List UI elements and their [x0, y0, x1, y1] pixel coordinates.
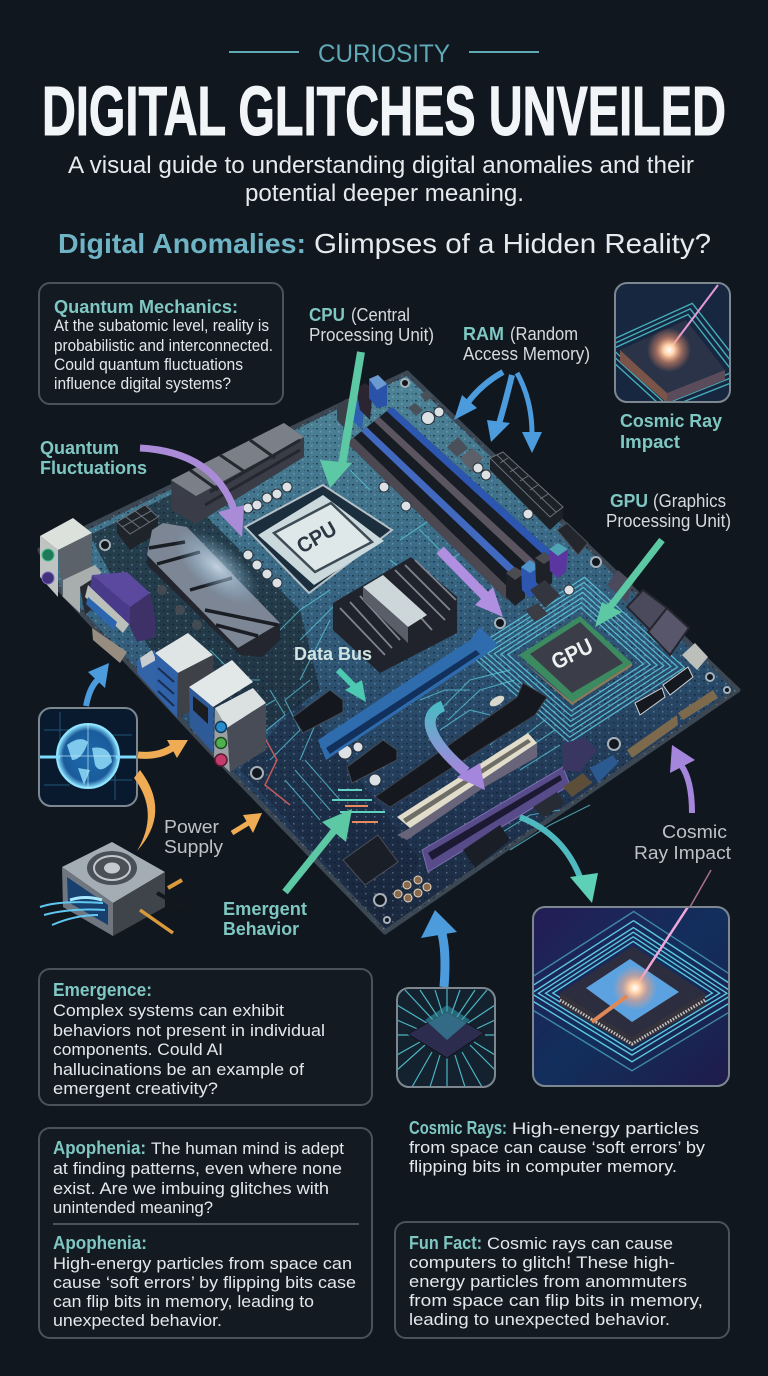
arrow: power: [232, 813, 262, 833]
panel: apophenia: unintended meaning?: [53, 1198, 213, 1217]
subtitle: A visual guide to understanding digital anomalies and their: [68, 152, 694, 179]
label: CPU: CPU: [309, 305, 345, 325]
glitch streaks: [332, 790, 385, 822]
panel: fun fact: Cosmic rays can cause: [487, 1234, 673, 1253]
label: RAM: (Random: [510, 324, 578, 344]
label: RAM: RAM: [463, 324, 504, 344]
GPU trace fans: [467, 577, 684, 742]
thumbnail: data chip: [397, 988, 495, 1087]
dark lower area: [240, 700, 420, 925]
panel: emergence: Complex systems can exhibit: [53, 1001, 284, 1020]
glitch sparkle: [162, 515, 272, 619]
arrow: to GPU region: [440, 550, 503, 617]
RAM bottom clips: [506, 543, 568, 606]
black slots: [293, 683, 547, 807]
arrow: data bus: [338, 670, 366, 702]
icon: power supply unit: [40, 842, 187, 936]
RAM top clips: [337, 375, 387, 430]
panel: apophenia: at finding patterns, even where none: [53, 1159, 342, 1178]
SATA connectors: [635, 667, 693, 715]
label: GPU: (Graphics: [653, 491, 726, 511]
rear ports: PS/2: [40, 518, 92, 597]
panel: quantum mechanics: influence digital systems?: [54, 374, 231, 393]
arrow: GPU: [595, 540, 662, 627]
board: [40, 373, 738, 932]
CPU: CPU: [293, 517, 341, 558]
capacitors: [243, 407, 574, 786]
arrow: globe right: [138, 740, 188, 758]
label: power supply: [164, 817, 223, 857]
white PCI slot: [397, 733, 537, 840]
panel: apophenia: [39, 1128, 372, 1338]
panel: fun fact: Fun Fact:: [409, 1233, 482, 1253]
8-pin connector: [117, 505, 158, 550]
subtitle: [68, 152, 694, 207]
PCIe blue slot: [318, 627, 498, 760]
label: quantum fluctuations: [40, 438, 147, 478]
label: quantum fluctuations: Quantum: [40, 438, 119, 458]
rear ports: LAN and audio: [189, 660, 266, 772]
red trace: [265, 740, 290, 805]
panel: apophenia: The human mind is adept: [151, 1139, 344, 1158]
small components near RAM: [408, 390, 560, 622]
panel: emergence: Emergence:: [53, 980, 152, 1000]
pin headers: [627, 690, 718, 758]
subtitle: potential deeper meaning.: [245, 180, 524, 207]
label: cosmic ray impact: Impact: [620, 432, 680, 452]
panel: apophenia: can flip bits in memory, leading to: [53, 1292, 314, 1311]
panel: apophenia: Apophenia:: [53, 1233, 147, 1253]
rear ports: VGA and DVI: [63, 565, 156, 663]
label: cosmic ray impact: [620, 411, 722, 452]
panel: fun fact: from space can flip bits in memory,: [409, 1291, 703, 1310]
GPU: GPU: [547, 633, 597, 674]
section heading: Digital Anomalies:: [58, 228, 306, 259]
panel: fun fact: energy particles from anommuters: [409, 1272, 687, 1291]
label: power supply: Power: [164, 817, 219, 837]
label: RAM: [463, 324, 590, 364]
motherboard illustration: [40, 373, 738, 932]
VRM heatsink left: [147, 523, 280, 657]
label: cosmic ray impact right: Cosmic: [662, 822, 727, 842]
arrow: CPU: [320, 352, 361, 488]
panel: emergence: components. Could AI: [53, 1040, 223, 1059]
arrow: to large chip: [520, 817, 598, 903]
arrow: chip up: [421, 910, 457, 987]
text: cosmic rays: from space can cause ‘soft errors’ by: [409, 1138, 706, 1157]
thumbnail: large chip impact: [534, 908, 728, 1085]
text: cosmic rays: flipping bits in computer memory.: [409, 1157, 677, 1176]
arrow: emergent: [285, 809, 352, 892]
label: emergent behavior: Behavior: [223, 919, 299, 939]
label: GPU: [606, 491, 731, 531]
arrow: globe up: [86, 663, 109, 706]
text: cosmic rays: [409, 1118, 706, 1176]
purple PCI slot: [422, 738, 597, 872]
VRM heatsink top: [171, 423, 304, 524]
eyebrow: curiosity: CURIOSITY: [318, 40, 450, 68]
panel: emergence: emergent creativity?: [53, 1079, 218, 1098]
section heading: [58, 228, 711, 259]
arrow: cosmic ray impact: [670, 745, 695, 813]
thumbnail frame: [615, 283, 730, 402]
mounting holes: [100, 379, 730, 923]
arrow: slot curve: [430, 706, 485, 790]
lower chip and capacitors: [343, 835, 431, 902]
GPU: [519, 616, 632, 705]
panel: emergence: [39, 969, 372, 1105]
arrows: RAM: [454, 372, 542, 453]
thumbnail: cosmic ray impact: [616, 284, 729, 401]
label: power supply: Supply: [164, 837, 223, 857]
RAM slots: [337, 375, 568, 606]
panel: emergence: behaviors not present in individual: [53, 1021, 325, 1040]
beam above panel: [690, 870, 711, 907]
panel: apophenia: High-energy particles from space can: [53, 1254, 352, 1273]
label: CPU: Processing Unit): [309, 325, 434, 345]
panel: quantum mechanics: probabilistic and interconnected.: [54, 336, 273, 355]
panel: fun fact: leading to unexpected behavior.: [409, 1310, 670, 1329]
CPU: [245, 485, 392, 593]
arrow: quantum fluctuations: [140, 448, 244, 537]
label: emergent behavior: [223, 899, 307, 939]
panel: fun fact: computers to glitch! These high-: [409, 1253, 675, 1272]
section heading: Glimpses of a Hidden Reality?: [314, 228, 711, 259]
panel: quantum mechanics: At the subatomic level, reality is: [54, 316, 269, 335]
label: GPU: Processing Unit): [606, 511, 731, 531]
label: cosmic ray impact right: Ray Impact: [634, 843, 731, 863]
text: cosmic rays: Cosmic Rays:: [409, 1118, 507, 1138]
thumbnail: globe: [39, 708, 137, 806]
panel: apophenia: exist. Are we imbuing glitches with: [53, 1179, 329, 1198]
panel: apophenia: unexpected behavior.: [53, 1311, 222, 1330]
label: quantum fluctuations: Fluctuations: [40, 458, 147, 478]
label: CPU: (Central: [351, 305, 410, 325]
panel: quantum mechanics: Could quantum fluctuations: [54, 355, 243, 374]
large chip frame: [533, 907, 729, 1086]
chipset heatsink: [333, 557, 457, 673]
data chip frame: [397, 988, 495, 1087]
label: cosmic ray impact right: [634, 822, 731, 863]
chokes near GPU: [607, 570, 708, 670]
panel: apophenia: Apophenia:: [53, 1138, 146, 1158]
label: GPU: GPU: [610, 491, 648, 511]
text: cosmic rays: High-energy particles: [512, 1119, 699, 1138]
panel: apophenia: cause ‘soft errors’ by flipping bits case: [53, 1273, 356, 1292]
dark area left of CPU: [90, 490, 320, 740]
panel: fun fact: [395, 1222, 729, 1338]
arrow: PSU to globe: [134, 770, 155, 851]
label: cosmic ray impact: Cosmic Ray: [620, 411, 722, 431]
circuit traces: [210, 470, 590, 850]
globe frame: [39, 708, 137, 806]
label: data bus: Data Bus: [294, 644, 372, 664]
panel: emergence: hallucinations be an example of: [53, 1060, 304, 1079]
rear ports: USB stacks: [137, 633, 213, 718]
label: emergent behavior: Emergent: [223, 899, 307, 919]
header: [42, 40, 726, 259]
label: RAM: Access Memory): [463, 344, 590, 364]
ATX connector: [490, 452, 588, 555]
crystal: [488, 694, 506, 708]
I/O headers: [463, 755, 618, 868]
panel: quantum mechanics: [39, 283, 283, 404]
speckle texture: [40, 373, 738, 932]
panel: quantum mechanics: Quantum Mechanics:: [54, 297, 238, 317]
label: CPU: [309, 305, 434, 345]
